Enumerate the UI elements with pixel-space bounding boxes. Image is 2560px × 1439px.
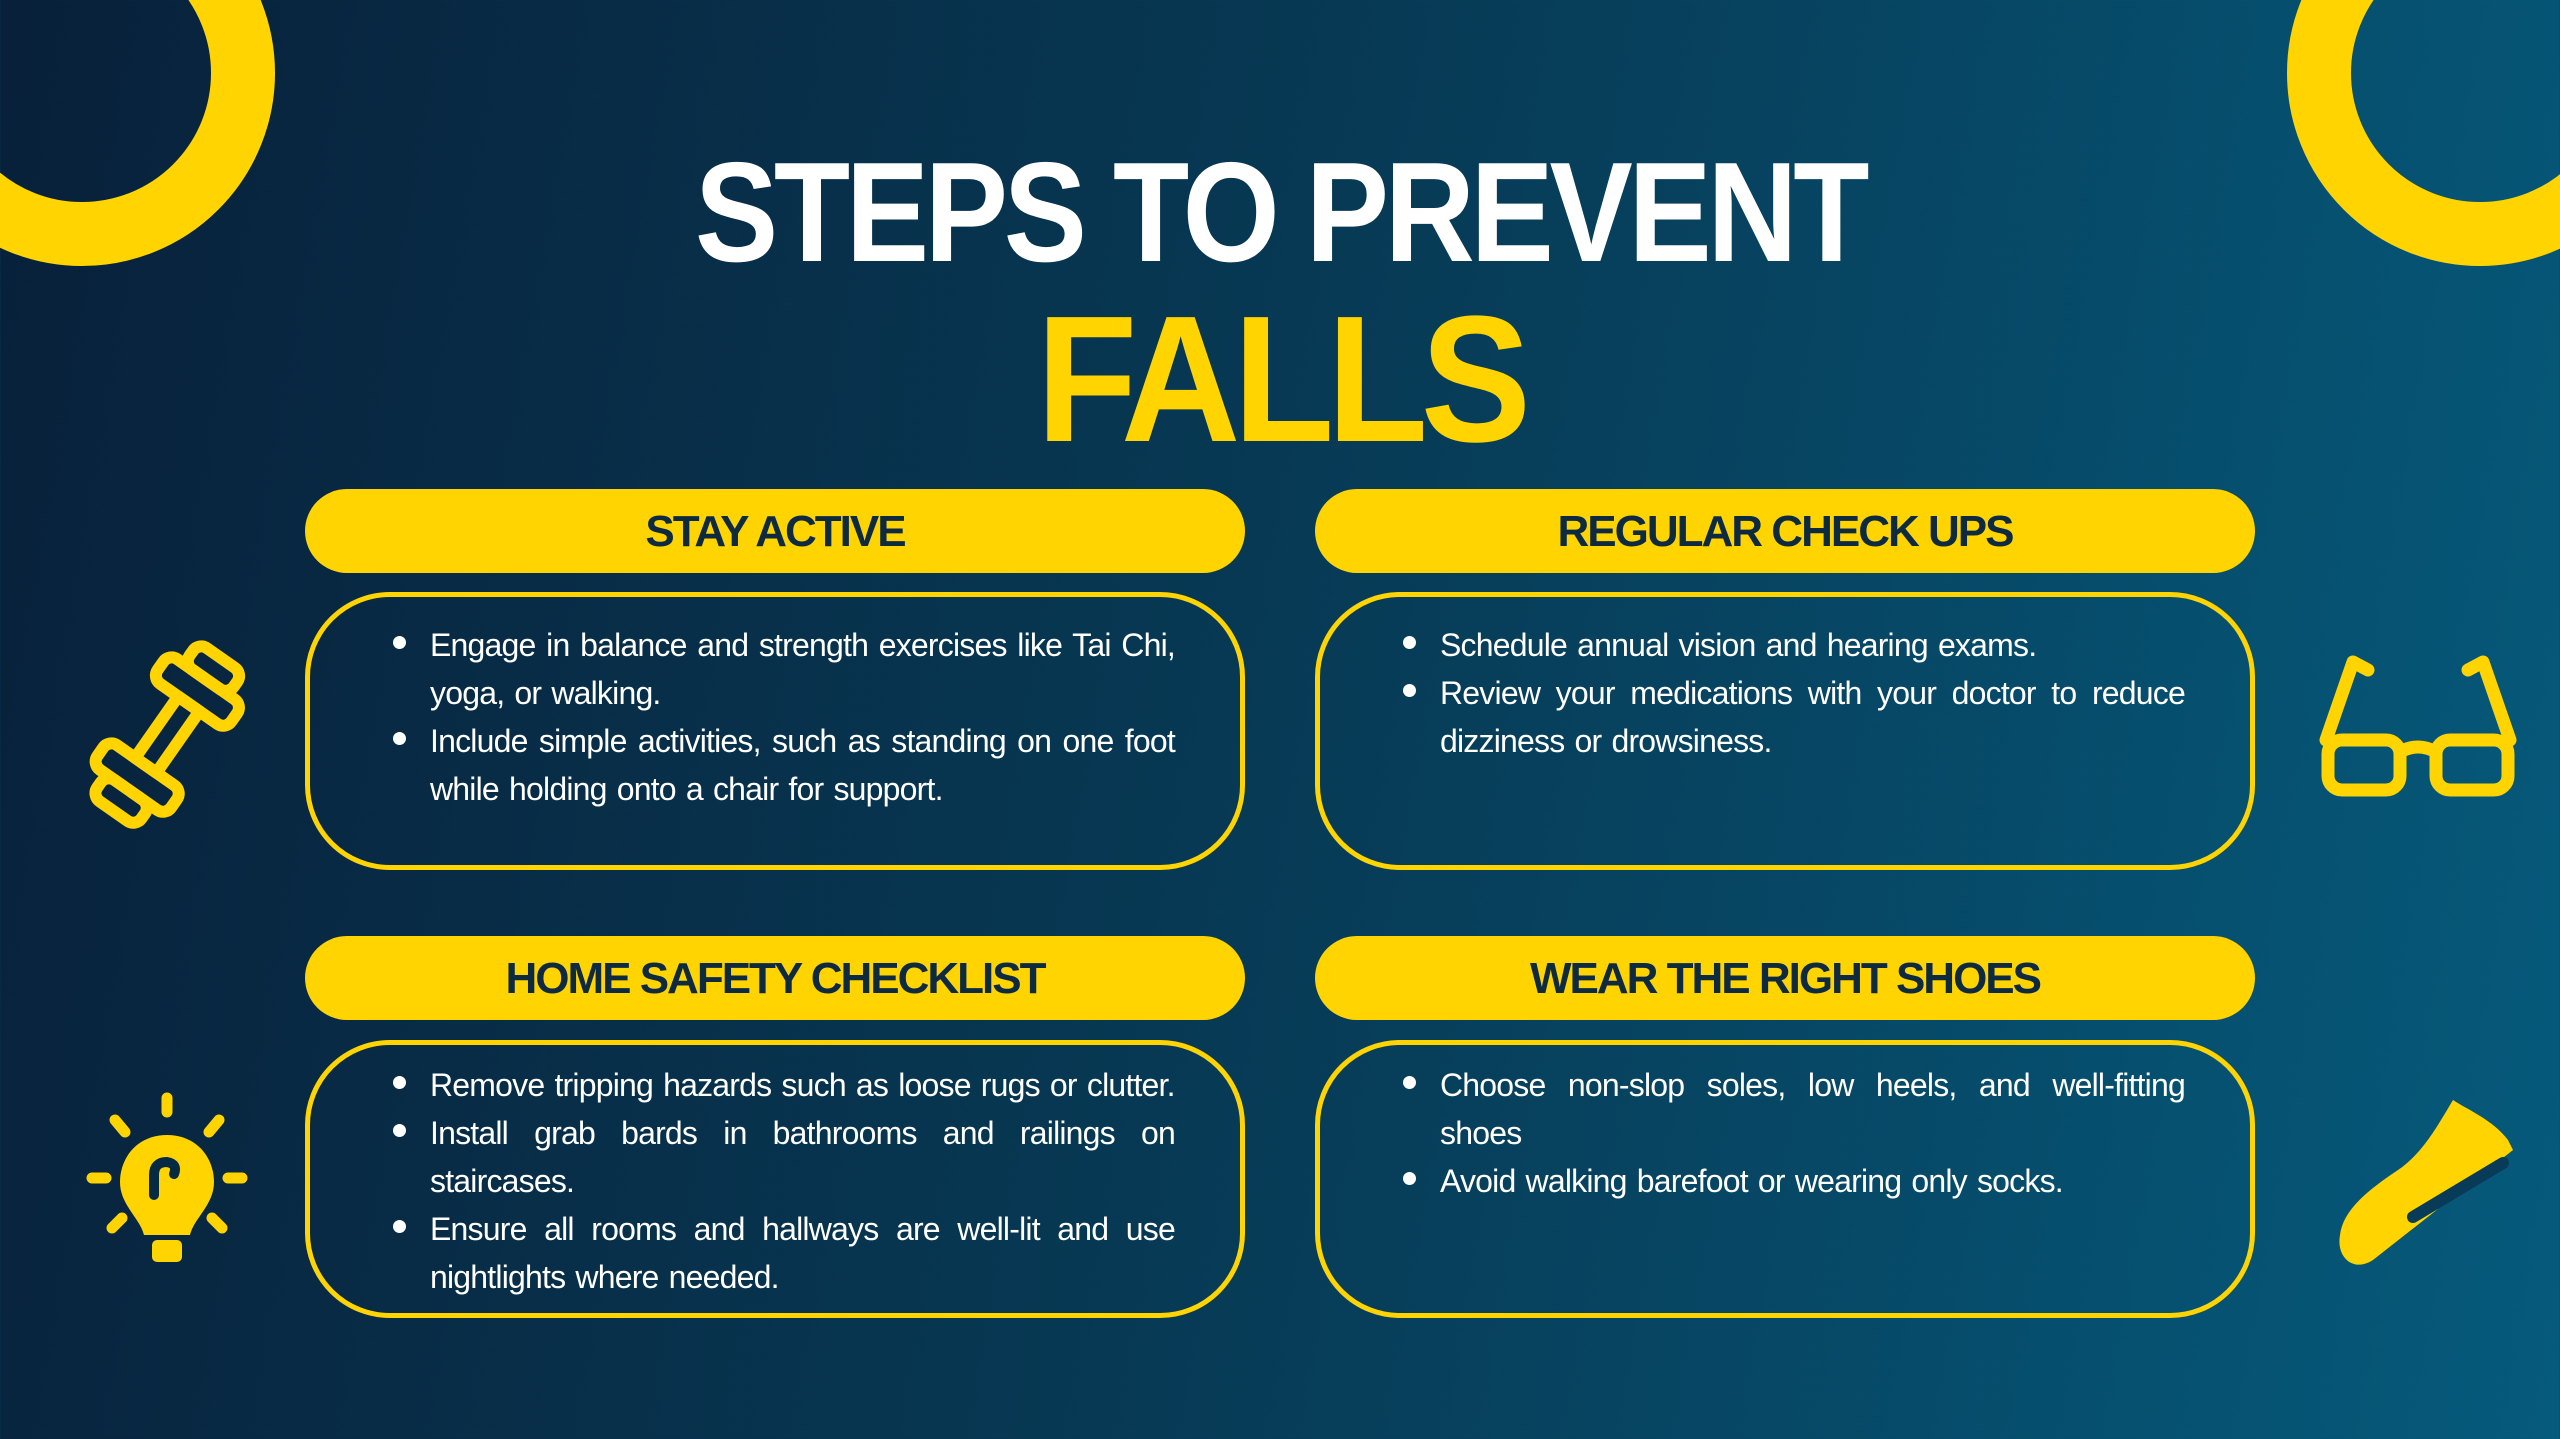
icon: dumbbell — [89, 640, 246, 829]
panel: home safety — [305, 1040, 1245, 1318]
header: stay active — [305, 489, 1245, 573]
icon: light bulb — [86, 1092, 248, 1262]
panel: shoes: Choose non-slop soles, low heels, and well-fitting shoes — [1440, 1067, 2185, 1151]
panel: regular check ups — [1315, 592, 2255, 870]
panel: stay active — [305, 592, 1245, 870]
panel: shoes: Avoid walking barefoot or wearing only socks. — [1440, 1163, 2063, 1199]
decorative ring top-left — [0, 0, 275, 266]
panel: home safety: Install grab bards in bathrooms and railings on staircases. — [430, 1115, 1175, 1199]
icon: glasses — [2320, 656, 2516, 796]
panel: shoes — [1315, 1040, 2255, 1318]
header: shoes — [1315, 936, 2255, 1020]
panel: regular check ups: Review your medications with your doctor to reduce dizziness or drowsiness. — [1440, 675, 2185, 759]
header: home safety: HOME SAFETY CHECKLIST — [505, 954, 1044, 1003]
panel: stay active: Engage in balance and strength exercises like Tai Chi, yoga, or walking. — [430, 627, 1175, 711]
panel: stay active: Include simple activities, such as standing on one foot while holding onto a chair for support. — [430, 723, 1175, 807]
title highlight: FALLS — [1036, 279, 1524, 480]
panel: regular check ups: Schedule annual vision and hearing exams. — [1440, 627, 2036, 663]
header: shoes: WEAR THE RIGHT SHOES — [1530, 954, 2040, 1003]
header: stay active: STAY ACTIVE — [645, 507, 905, 556]
header: regular check ups — [1315, 489, 2255, 573]
decorative ring top-right — [2287, 0, 2560, 266]
panel: home safety: Ensure all rooms and hallways are well-lit and use nightlights where needed. — [430, 1211, 1175, 1295]
panel: home safety: Remove tripping hazards such as loose rugs or clutter. — [430, 1067, 1175, 1103]
icon: shoe — [2339, 1100, 2513, 1265]
title: STEPS TO PREVENT — [695, 133, 1865, 292]
header: home safety — [305, 936, 1245, 1020]
header: regular check ups: REGULAR CHECK UPS — [1558, 507, 2012, 556]
